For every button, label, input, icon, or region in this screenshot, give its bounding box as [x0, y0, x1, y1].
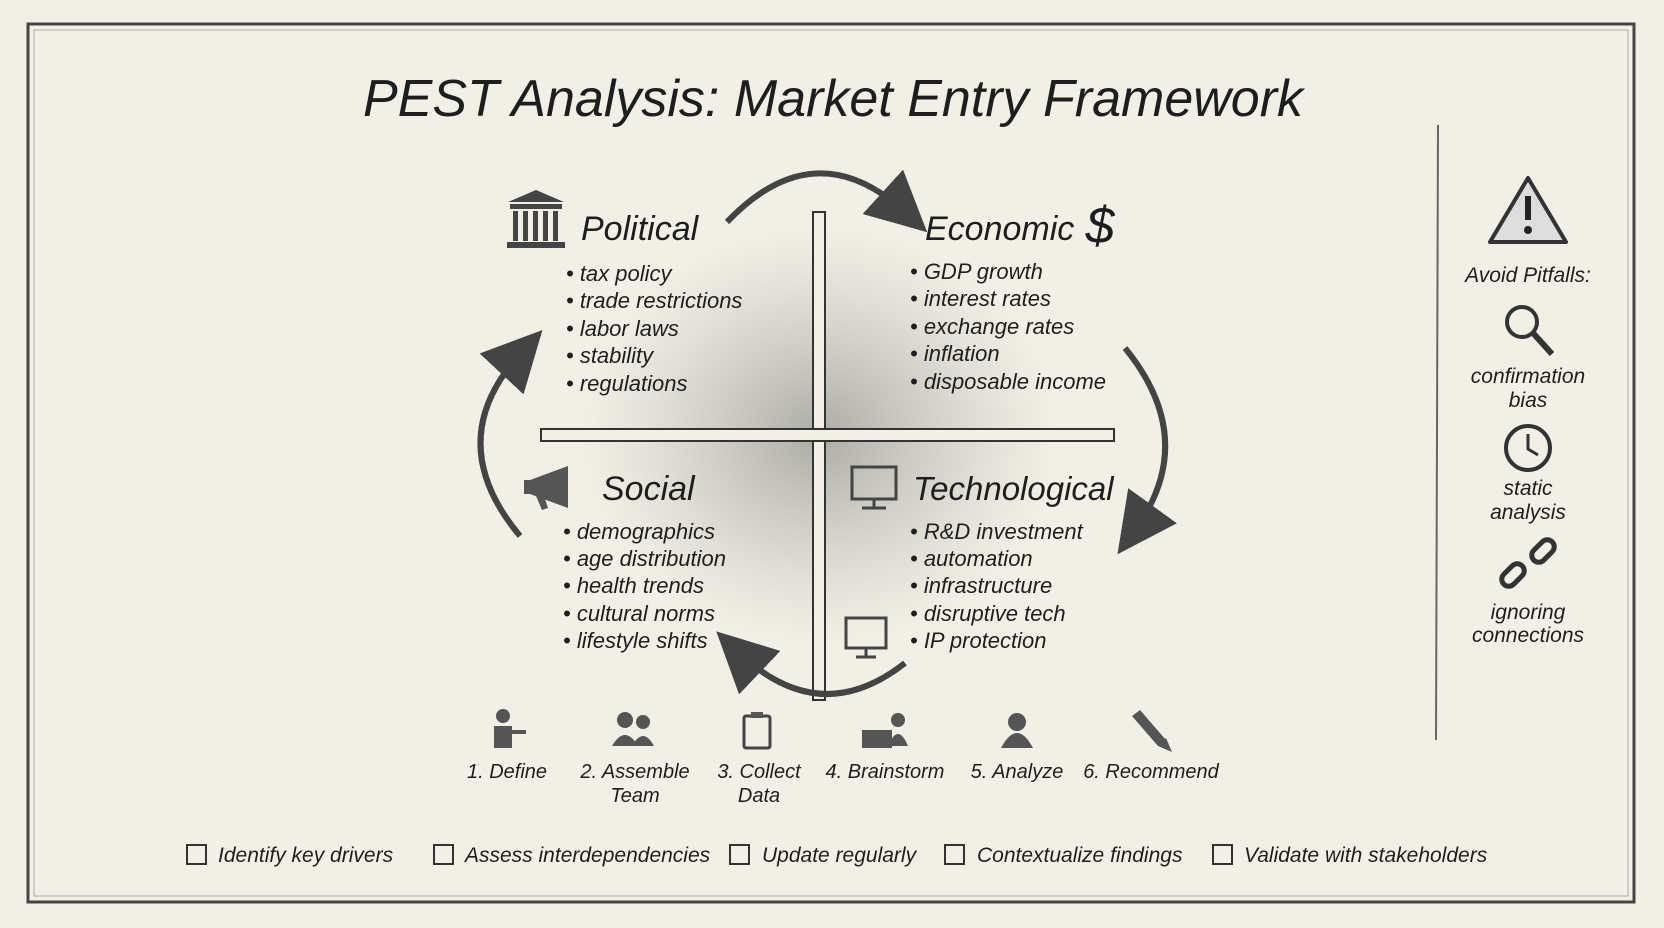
- panel: political: • regulations: [566, 371, 687, 396]
- panel: social: Social: [602, 470, 696, 508]
- panel: economic: • inflation: [910, 341, 1000, 366]
- step icons: [494, 709, 1172, 752]
- panel: social: • lifestyle shifts: [563, 628, 708, 653]
- icon: dollar: $: [1085, 197, 1116, 255]
- process steps: 6. Recommend: [1083, 761, 1220, 783]
- panel: economic: Economic: [925, 210, 1074, 248]
- panel: political: Political: [581, 210, 700, 248]
- panel: social: [524, 466, 726, 653]
- panel: political: • stability: [566, 343, 655, 368]
- panel: political: • tax policy: [566, 261, 674, 286]
- arrows: [480, 173, 1165, 694]
- process steps: 3. Collect: [717, 761, 802, 783]
- process steps: 4. Brainstorm: [826, 761, 944, 783]
- panel: pitfalls: [1463, 178, 1591, 647]
- panel: technological: [846, 467, 1115, 657]
- panel: pitfalls: connections: [1472, 624, 1585, 647]
- panel: technological: Technological: [913, 470, 1115, 507]
- panel: technological: • automation: [910, 546, 1033, 571]
- process steps: Team: [610, 785, 660, 807]
- panel: pitfalls: static: [1503, 477, 1553, 500]
- icon: megaphone: [524, 466, 568, 510]
- panel: pitfalls: ignoring: [1491, 601, 1566, 624]
- process steps: 1. Define: [467, 761, 547, 783]
- checklist: [187, 844, 1488, 867]
- panel: social: • demographics: [563, 519, 715, 544]
- icon: broken link: [1499, 537, 1557, 589]
- icon: building: [507, 190, 565, 248]
- panel: political: • labor laws: [566, 316, 679, 341]
- checklist: Update regularly: [762, 844, 918, 867]
- panel: social: • cultural norms: [563, 601, 715, 626]
- panel: pitfalls: confirmation: [1471, 365, 1585, 388]
- panel: technological: • disruptive tech: [910, 601, 1066, 626]
- panel: political: [507, 190, 742, 396]
- process steps: 2. Assemble: [579, 761, 690, 783]
- process steps: Data: [738, 785, 780, 807]
- panel: political: • trade restrictions: [566, 288, 742, 313]
- panel: economic: • GDP growth: [910, 259, 1043, 284]
- icon: warning: [1490, 178, 1566, 242]
- panel: technological: • R&D investment: [910, 519, 1084, 544]
- icon: magnifier: [1507, 307, 1552, 354]
- panel: pitfalls: Avoid Pitfalls:: [1463, 264, 1591, 287]
- icon: clock: [1506, 426, 1550, 470]
- panel: social: • health trends: [563, 573, 704, 598]
- panel: pitfalls: bias: [1509, 389, 1548, 412]
- process steps: 5. Analyze: [971, 761, 1063, 783]
- panel: economic: [910, 197, 1116, 394]
- quadrant cross: [541, 212, 1114, 700]
- panel: economic: • disposable income: [910, 369, 1106, 394]
- checklist: Contextualize findings: [977, 844, 1183, 867]
- panel: technological: • infrastructure: [910, 573, 1052, 598]
- divider right: [1436, 125, 1438, 740]
- panel: pitfalls: analysis: [1490, 501, 1566, 524]
- panel: economic: • exchange rates: [910, 314, 1074, 339]
- process steps: [467, 709, 1220, 807]
- panel: economic: • interest rates: [910, 286, 1051, 311]
- panel: social: • age distribution: [563, 546, 726, 571]
- checklist: Assess interdependencies: [463, 844, 711, 867]
- title: PEST Analysis: Market Entry Framework: [363, 70, 1306, 128]
- icon: monitor: [852, 467, 896, 508]
- checklist: Identify key drivers: [218, 844, 394, 867]
- panel: technological: • IP protection: [910, 628, 1047, 653]
- checklist: Validate with stakeholders: [1244, 844, 1488, 867]
- icon: monitor 2: [846, 618, 886, 657]
